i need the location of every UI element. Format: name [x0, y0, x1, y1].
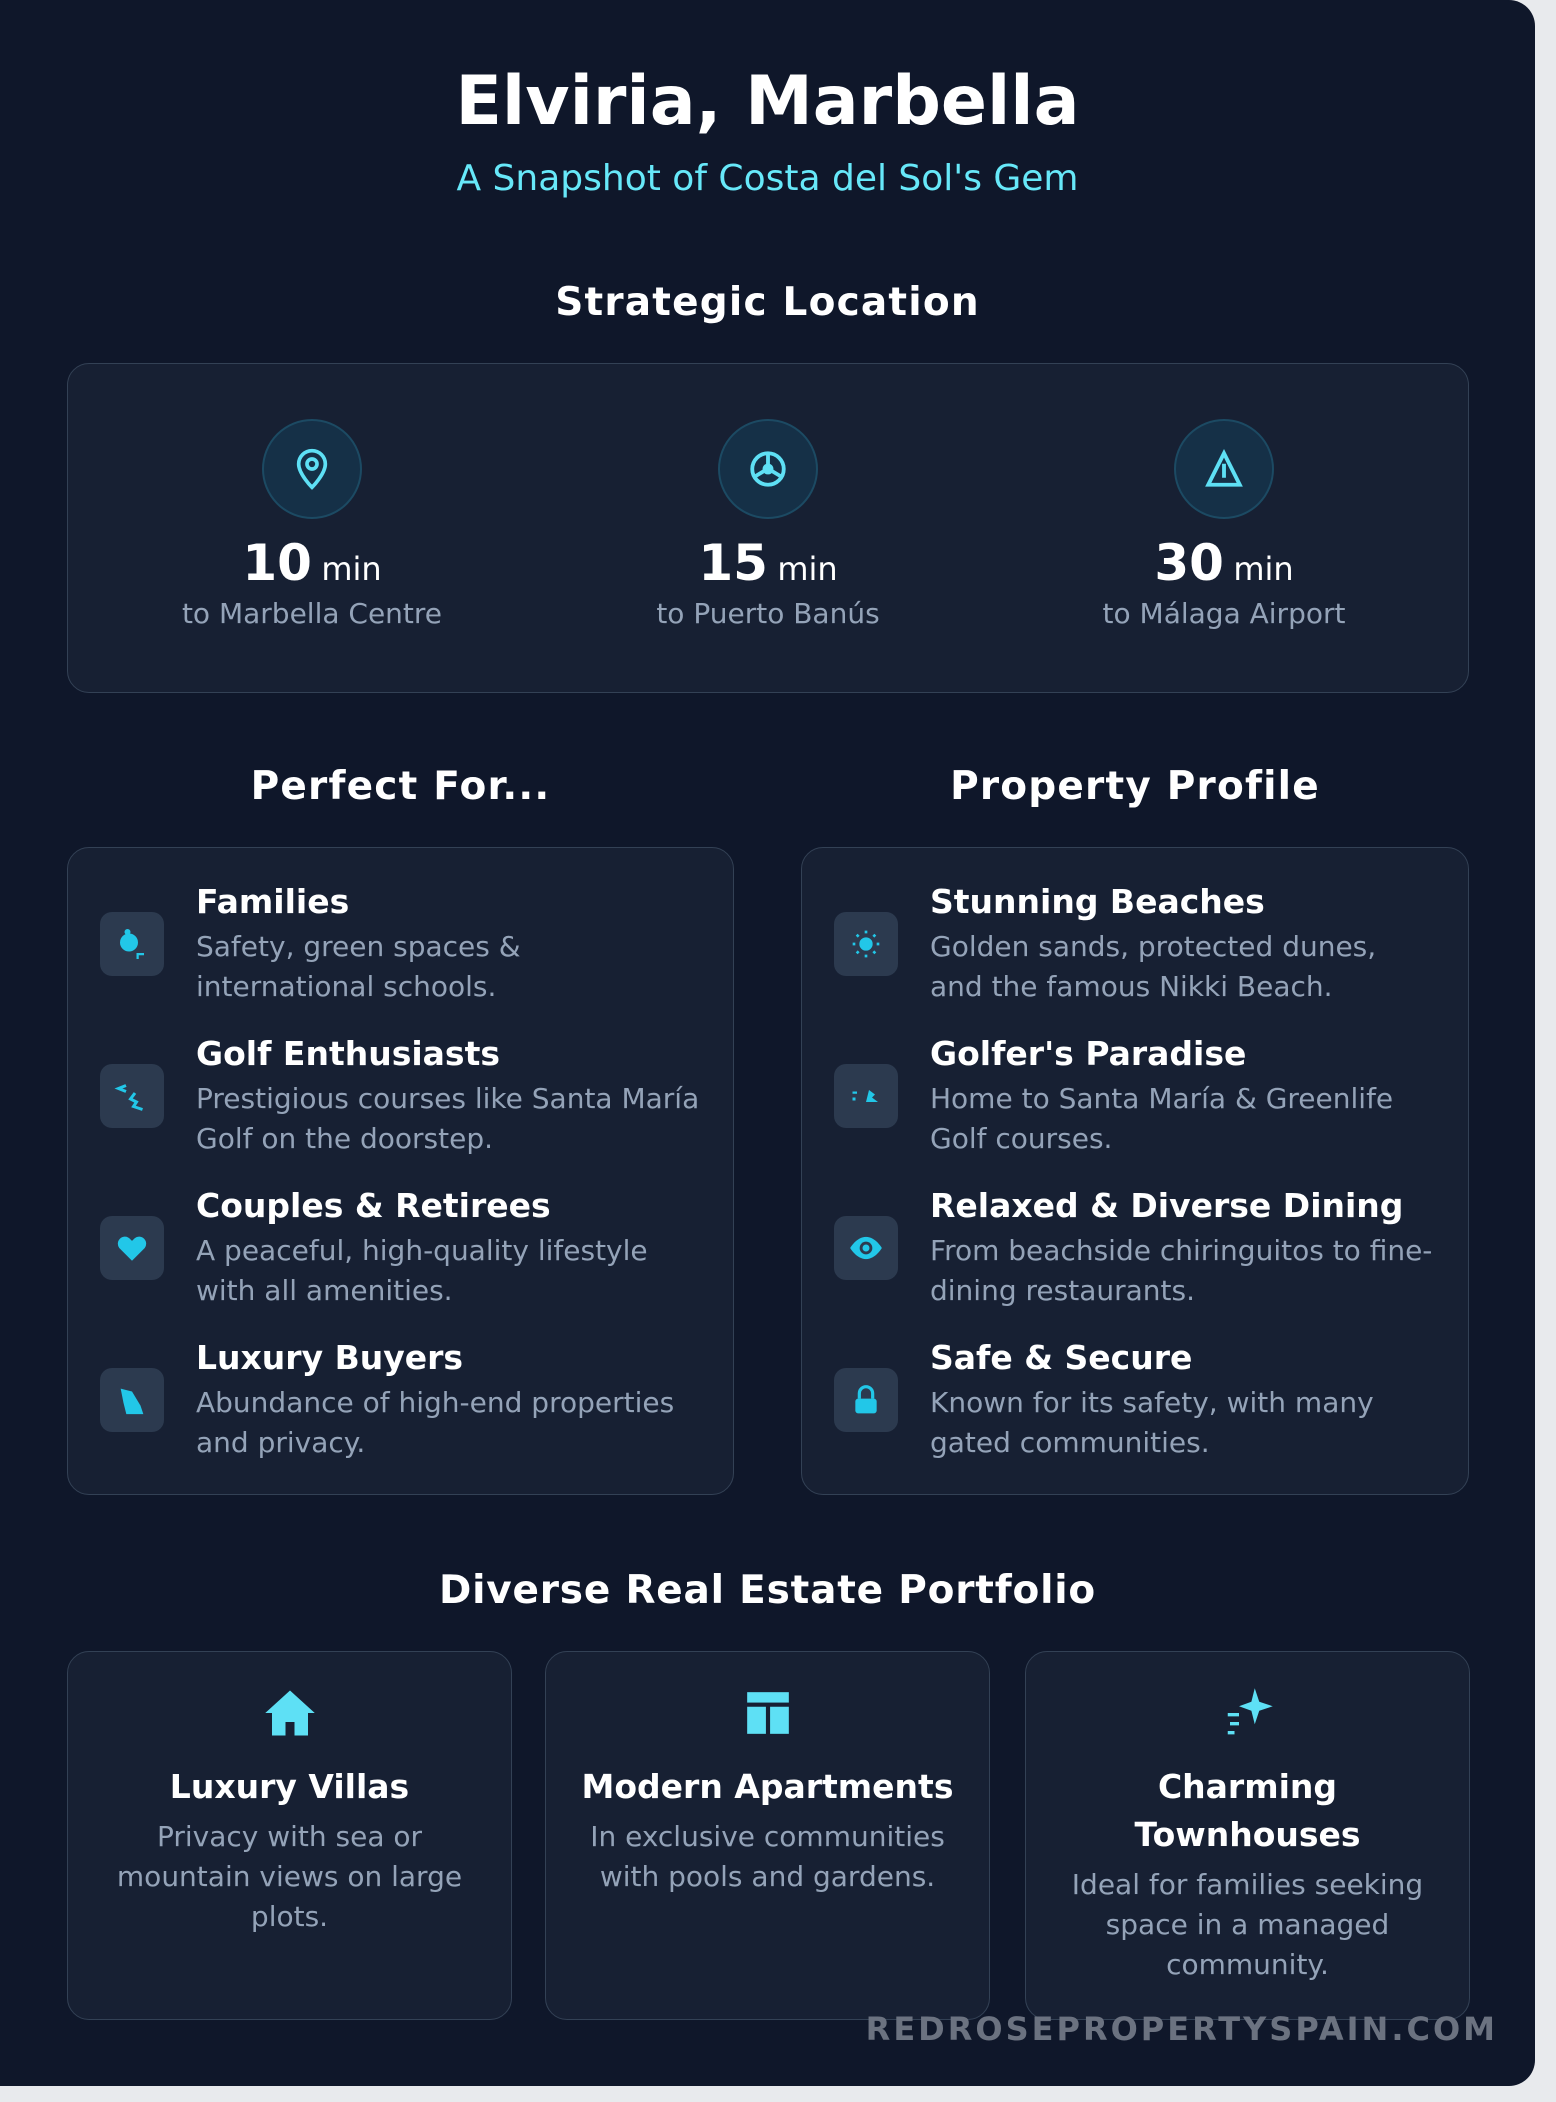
item: golf: Golf Enthusiasts — [196, 1034, 500, 1073]
item: families: Safety, green spaces & — [196, 930, 521, 963]
item: dining — [834, 1186, 1432, 1307]
location: airport: to Málaga Airport — [1103, 597, 1345, 630]
item: golf — [100, 1034, 699, 1155]
card: apartments — [545, 1651, 990, 2020]
location: puerto banus — [656, 419, 880, 630]
item: golfers paradise — [834, 1034, 1393, 1155]
location: puerto banus: to Puerto Banús — [656, 597, 880, 630]
title: Elviria, Marbella — [455, 62, 1080, 141]
heading: strategic location: Strategic Location — [555, 280, 980, 325]
card: villas: Luxury Villas — [170, 1767, 409, 1806]
subtitle: A Snapshot of Costa del Sol's Gem — [456, 158, 1079, 199]
item: golfers paradise: Golfer's Paradise — [930, 1034, 1246, 1073]
card: townhouses — [1025, 1651, 1470, 2020]
item: couples: with all amenities. — [196, 1274, 453, 1307]
card: apartments: In exclusive communities with pools and gardens. — [590, 1820, 945, 1893]
item: families: Families — [196, 882, 349, 921]
card: villas — [67, 1651, 512, 2020]
item: golfers paradise: Golf courses. — [930, 1122, 1112, 1155]
item: safe: gated communities. — [930, 1426, 1210, 1459]
item: luxury: Luxury Buyers — [196, 1338, 463, 1377]
item: dining: From beachside chiringuitos to fine- — [930, 1234, 1432, 1267]
card: villas: Privacy with sea or mountain views on large plots. — [117, 1820, 462, 1933]
item: beaches: Stunning Beaches — [930, 882, 1265, 921]
item: couples: A peaceful, high-quality lifestyle — [196, 1234, 648, 1267]
watermark: REDROSEPROPERTYSPAIN.COM — [866, 2010, 1498, 2048]
item: families: international schools. — [196, 970, 496, 1003]
item: families — [100, 882, 521, 1003]
card: apartments: Modern Apartments — [582, 1767, 953, 1806]
item: dining: Relaxed & Diverse Dining — [930, 1186, 1403, 1225]
item: luxury — [100, 1338, 674, 1459]
item: dining: dining restaurants. — [930, 1274, 1195, 1307]
heading: property profile: Property Profile — [950, 764, 1320, 809]
heading: portfolio: Diverse Real Estate Portfolio — [439, 1568, 1096, 1613]
card: townhouses: Charming — [1158, 1767, 1337, 1806]
location: marbella: 10 min — [242, 534, 382, 592]
item: safe: Safe & Secure — [930, 1338, 1192, 1377]
panel: property profile — [801, 847, 1469, 1495]
card: townhouses: Ideal for families seeking space in a managed community. — [1072, 1868, 1423, 1981]
item: beaches: Golden sands, protected dunes, — [930, 930, 1376, 963]
location: marbella — [182, 419, 442, 630]
heading: perfect for: Perfect For... — [251, 764, 550, 809]
location: puerto banus: 15 min — [698, 534, 838, 592]
item: golf: Prestigious courses like Santa María — [196, 1082, 699, 1115]
item: safe — [834, 1338, 1374, 1459]
panel: location — [67, 363, 1469, 693]
item: beaches — [834, 882, 1376, 1003]
item: safe: Known for its safety, with many — [930, 1386, 1374, 1419]
item: golfers paradise: Home to Santa María & Greenlife — [930, 1082, 1393, 1115]
item: couples: Couples & Retirees — [196, 1186, 551, 1225]
location: marbella: to Marbella Centre — [182, 597, 442, 630]
item: golf: Golf on the doorstep. — [196, 1122, 493, 1155]
card: townhouses: Townhouses — [1134, 1815, 1361, 1854]
item: beaches: and the famous Nikki Beach. — [930, 970, 1333, 1003]
location: airport: 30 min — [1154, 534, 1294, 592]
item: luxury: Abundance of high-end properties — [196, 1386, 674, 1419]
location: airport — [1103, 419, 1345, 630]
item: luxury: and privacy. — [196, 1426, 365, 1459]
panel: perfect for — [67, 847, 734, 1495]
item: couples — [100, 1186, 648, 1307]
